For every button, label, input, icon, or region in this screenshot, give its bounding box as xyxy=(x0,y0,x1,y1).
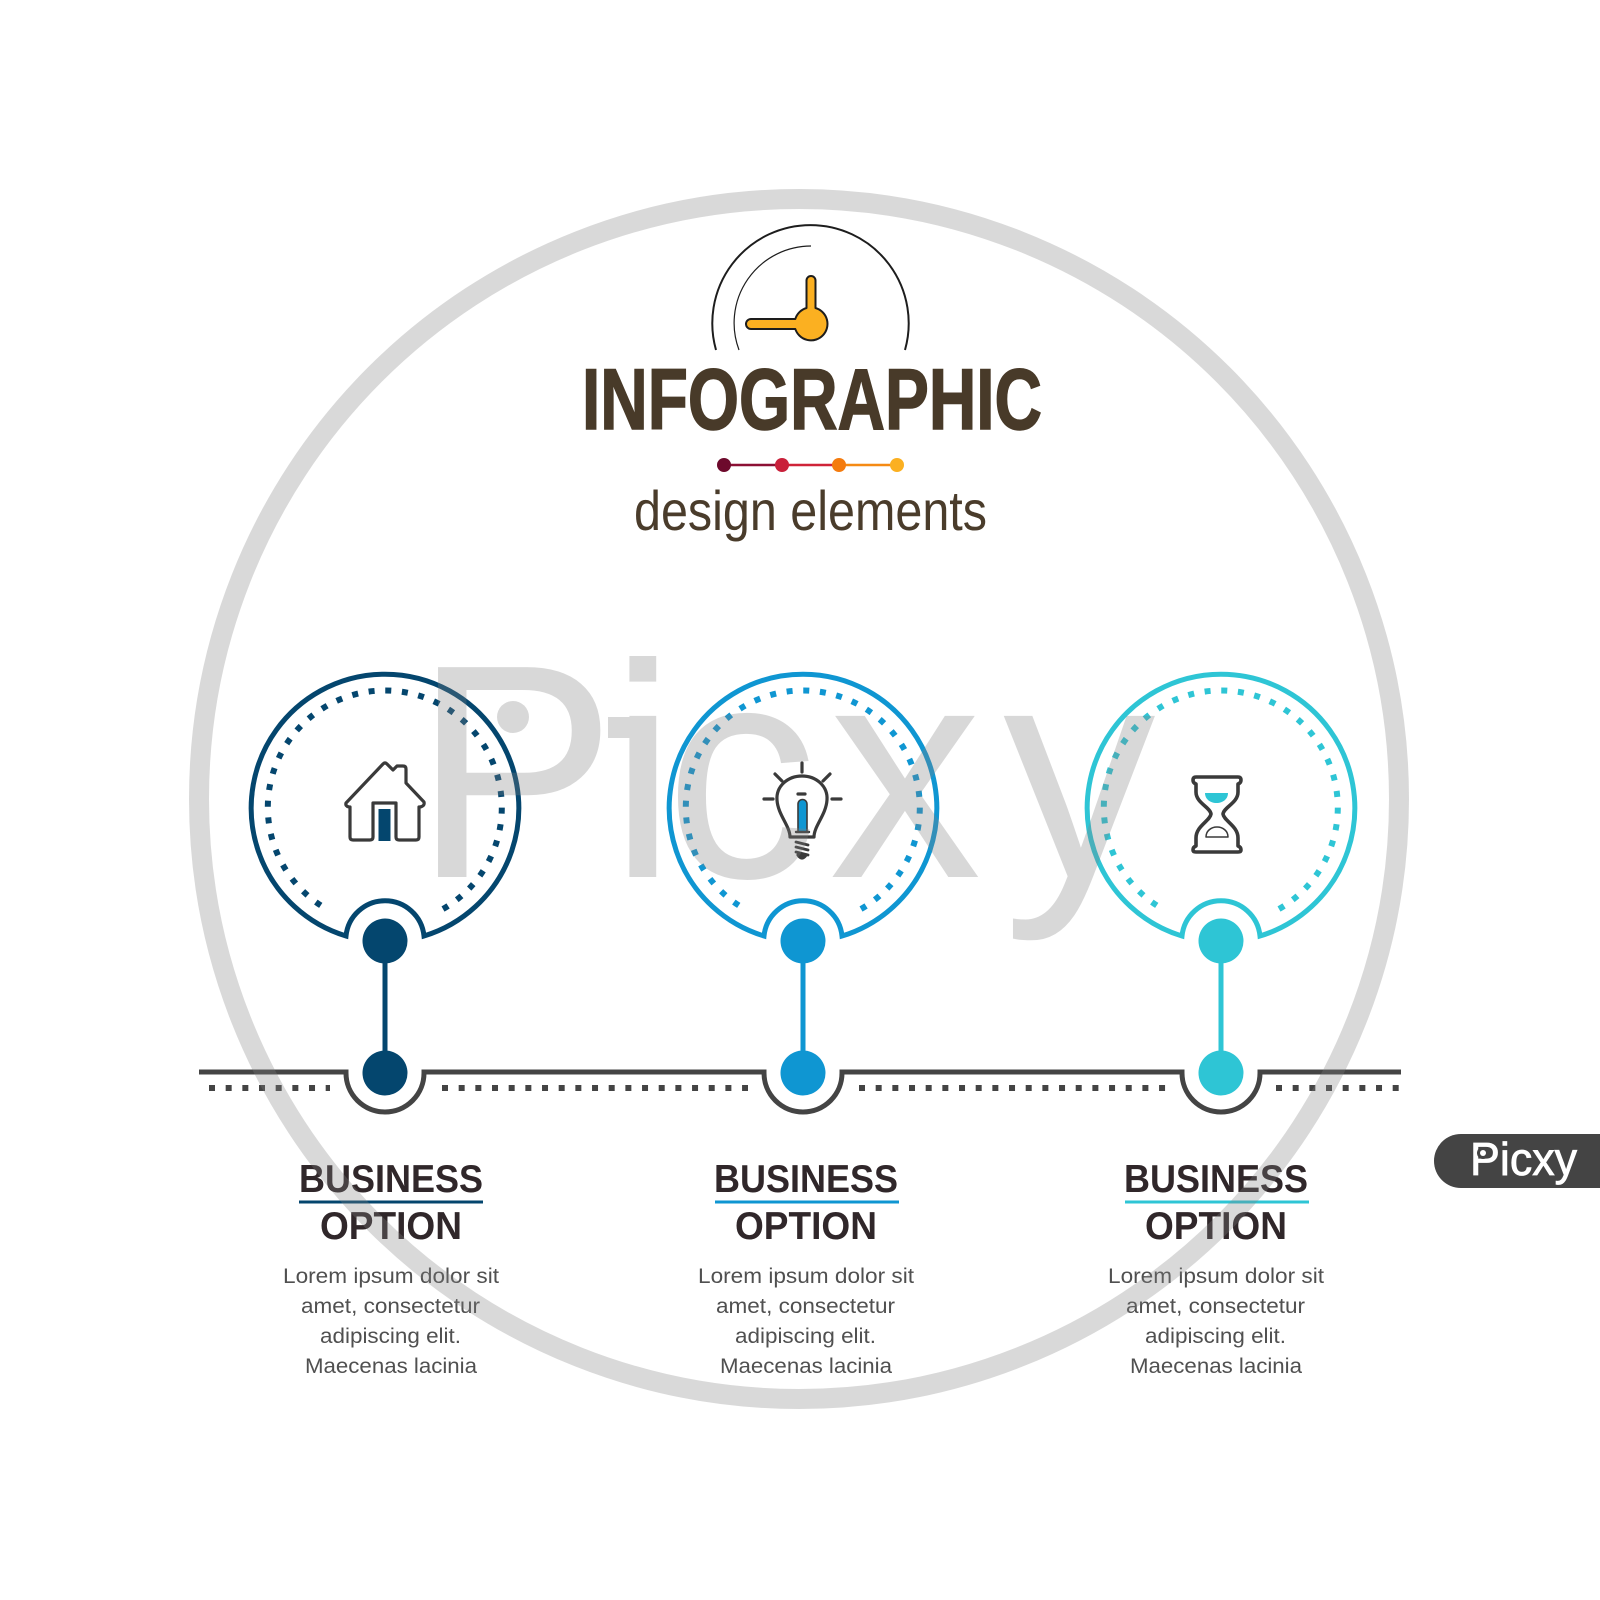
ring 1 xyxy=(251,674,519,936)
body text 2: adipiscing elit. xyxy=(735,1324,876,1348)
subtitle: design elements xyxy=(634,479,987,542)
dotted ring 2 xyxy=(686,690,920,911)
body text 3: adipiscing elit. xyxy=(1145,1324,1286,1348)
baseline track xyxy=(199,1072,1401,1112)
body text 2: amet, consectetur xyxy=(716,1294,895,1318)
watermark: ring and wordmark: Picxy xyxy=(413,601,1156,944)
body text 3 xyxy=(1108,1264,1324,1378)
dotted ring 1 xyxy=(268,690,502,911)
body text 2: Maecenas lacinia xyxy=(720,1354,892,1378)
heading 1: OPTION xyxy=(320,1205,462,1248)
body text 3: Lorem ipsum dolor sit xyxy=(1108,1264,1324,1288)
ring 3 xyxy=(1087,674,1355,936)
ring 2 xyxy=(669,674,937,936)
body text 1: amet, consectetur xyxy=(301,1294,480,1318)
panel: option 3 xyxy=(1087,674,1355,1378)
panel: option 2 xyxy=(669,674,937,1378)
body text 1: Maecenas lacinia xyxy=(305,1354,477,1378)
heading 2: BUSINESS xyxy=(714,1158,898,1201)
heading 3: OPTION xyxy=(1145,1205,1287,1248)
body text 3: Maecenas lacinia xyxy=(1130,1354,1302,1378)
dotted ring 3 xyxy=(1104,690,1338,911)
heading 3 xyxy=(1124,1158,1309,1248)
body text 1 xyxy=(283,1264,499,1378)
timeline dots xyxy=(717,458,904,472)
heading 1: BUSINESS xyxy=(299,1158,483,1201)
heading 2: OPTION xyxy=(735,1205,877,1248)
connector 2 xyxy=(780,918,826,1096)
body text 1: adipiscing elit. xyxy=(320,1324,461,1348)
body text 3: amet, consectetur xyxy=(1126,1294,1305,1318)
heading 2 xyxy=(714,1158,899,1248)
connector 3 xyxy=(1198,918,1244,1096)
watermark badge: Picxy xyxy=(1470,1133,1577,1185)
heading 3: BUSINESS xyxy=(1124,1158,1308,1201)
body text 2 xyxy=(698,1264,914,1378)
connector 1 xyxy=(362,918,408,1096)
watermark: ring and wordmark xyxy=(199,199,1399,1399)
title: INFOGRAPHIC xyxy=(582,352,1042,448)
icon: clock xyxy=(712,225,909,350)
icon: hourglass xyxy=(1193,777,1241,852)
icon: light bulb xyxy=(764,763,841,858)
heading 1 xyxy=(299,1158,483,1248)
icon: house xyxy=(346,763,424,841)
body text 2: Lorem ipsum dolor sit xyxy=(698,1264,914,1288)
panel: option 1 xyxy=(251,674,519,1378)
watermark badge xyxy=(1434,1133,1600,1188)
body text 1: Lorem ipsum dolor sit xyxy=(283,1264,499,1288)
